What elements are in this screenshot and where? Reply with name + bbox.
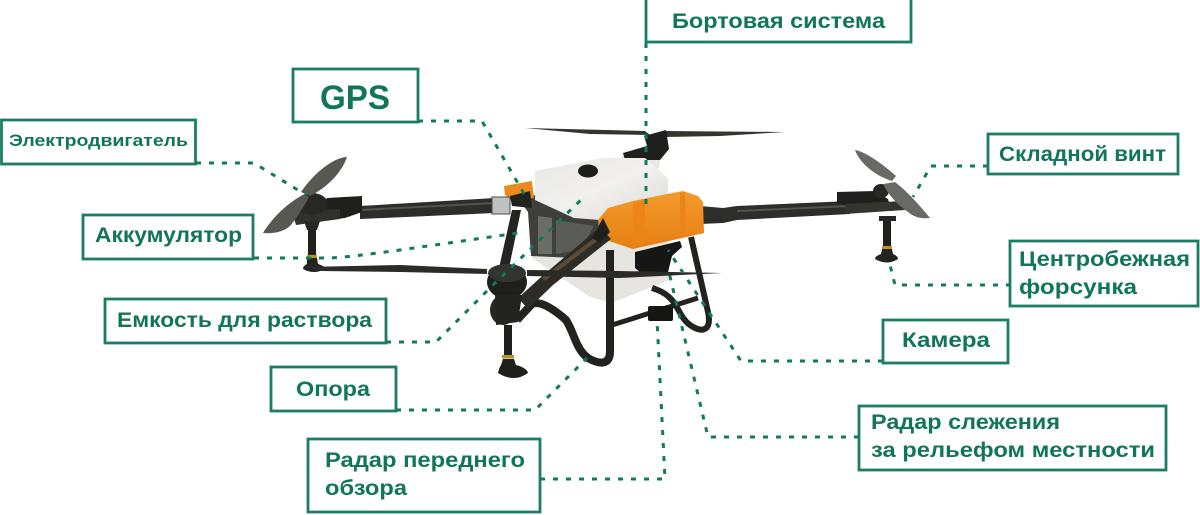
- right arm with folded propeller: [700, 150, 930, 262]
- label: GPS: GPS: [320, 79, 390, 117]
- front propeller: [305, 265, 722, 278]
- front leg and nozzle: [498, 325, 528, 378]
- label: centrifugal nozzle: Центробежная: [1019, 248, 1190, 271]
- label: leg: Опора: [296, 378, 370, 401]
- label: leg: [271, 367, 396, 411]
- front arm: [518, 227, 611, 309]
- leader line: terrain radar: [668, 268, 859, 437]
- leader line: nozzle: [890, 265, 1011, 285]
- leader line: motor: [196, 163, 306, 195]
- label: folding propeller: Складной винт: [999, 143, 1166, 166]
- label: battery: Аккумулятор: [95, 224, 242, 247]
- front radar unit: [648, 306, 673, 321]
- leader line: leg: [396, 358, 587, 410]
- label: terrain radar: Радар слежения: [871, 411, 1060, 434]
- label: front radar: обзора: [325, 477, 407, 500]
- label: solution tank: [105, 299, 386, 343]
- label: electric motor: Электродвигатель: [9, 131, 188, 150]
- label: front radar: Радар переднего: [325, 449, 525, 472]
- leader line: battery: [254, 232, 525, 258]
- leader line: camera: [668, 250, 883, 361]
- label: camera: [883, 320, 1008, 363]
- tank top: [535, 158, 668, 220]
- leader line: front radar: [540, 320, 665, 479]
- label: onboard system: [646, 0, 911, 42]
- label: terrain radar: за рельефом местности: [871, 439, 1155, 462]
- leader line: folding propeller: [913, 166, 988, 197]
- label: onboard system: Бортовая система: [672, 10, 885, 33]
- left arm with folded propeller: [263, 157, 495, 272]
- front motor: [487, 264, 527, 325]
- rear propeller and collar: [525, 128, 785, 177]
- battery connector: [492, 197, 510, 214]
- tank lower body: [530, 190, 669, 303]
- camera block: [635, 241, 682, 272]
- label: centrifugal nozzle: форсунка: [1019, 276, 1137, 299]
- leader line: GPS: [418, 121, 527, 199]
- landing gear: [517, 237, 709, 363]
- label: solution tank: Емкость для раствора: [117, 309, 372, 332]
- label: folding propeller: [988, 134, 1178, 174]
- label: front radar: [308, 439, 540, 512]
- leader line: tank: [386, 197, 584, 342]
- dark battery section: [518, 195, 600, 258]
- leader line: onboard system: [644, 43, 648, 210]
- label: centrifugal nozzle: [1010, 241, 1198, 306]
- label: electric motor: [2, 120, 196, 164]
- rear strut: [499, 210, 521, 268]
- label: GPS: [293, 69, 418, 122]
- front orange cover: [598, 191, 704, 249]
- label: battery: [83, 215, 253, 259]
- tank filler cap: [578, 164, 598, 178]
- drone illustration: [263, 128, 930, 378]
- label: camera: Камера: [902, 329, 990, 352]
- label: terrain radar: [859, 406, 1166, 470]
- rear orange cover: [504, 181, 534, 201]
